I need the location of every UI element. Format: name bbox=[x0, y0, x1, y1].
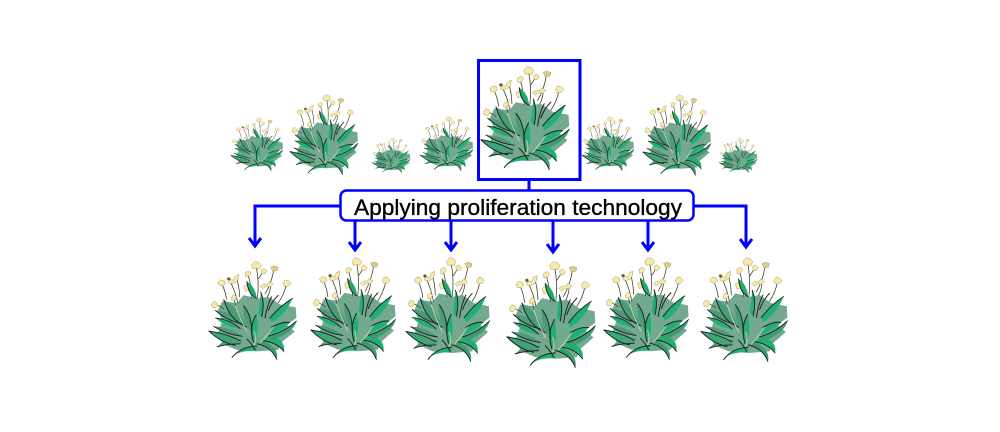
selection frame around plant bbox=[478, 60, 580, 180]
arrow: 5 bbox=[642, 221, 654, 250]
clone 5 bbox=[604, 258, 688, 359]
plant 3 bbox=[372, 138, 410, 173]
clone 2 bbox=[311, 258, 396, 359]
arrow: far right bbox=[693, 206, 752, 247]
label text: Applying proliferation technology bbox=[354, 195, 682, 220]
arrow: 4 bbox=[547, 221, 559, 252]
plant 4 bbox=[420, 117, 473, 171]
arrow: 2 bbox=[349, 221, 361, 250]
arrow: far left bbox=[249, 206, 341, 246]
plant 2 bbox=[290, 95, 358, 175]
bottom row: proliferated plants bbox=[209, 258, 787, 367]
label box bbox=[340, 190, 694, 220]
clone 4 bbox=[507, 262, 595, 367]
plant 7 bbox=[643, 95, 711, 175]
plant 1 bbox=[231, 118, 283, 171]
plant 6 bbox=[582, 117, 634, 171]
connector from frame to label bbox=[528, 180, 530, 191]
clone 1 bbox=[209, 262, 296, 359]
arrow: 3 bbox=[445, 221, 457, 250]
clone 6 bbox=[701, 258, 787, 361]
plant 8 bbox=[719, 138, 757, 173]
top row: mixed source plants bbox=[231, 67, 757, 175]
selected plant bbox=[481, 67, 569, 169]
clone 3 bbox=[406, 258, 490, 361]
